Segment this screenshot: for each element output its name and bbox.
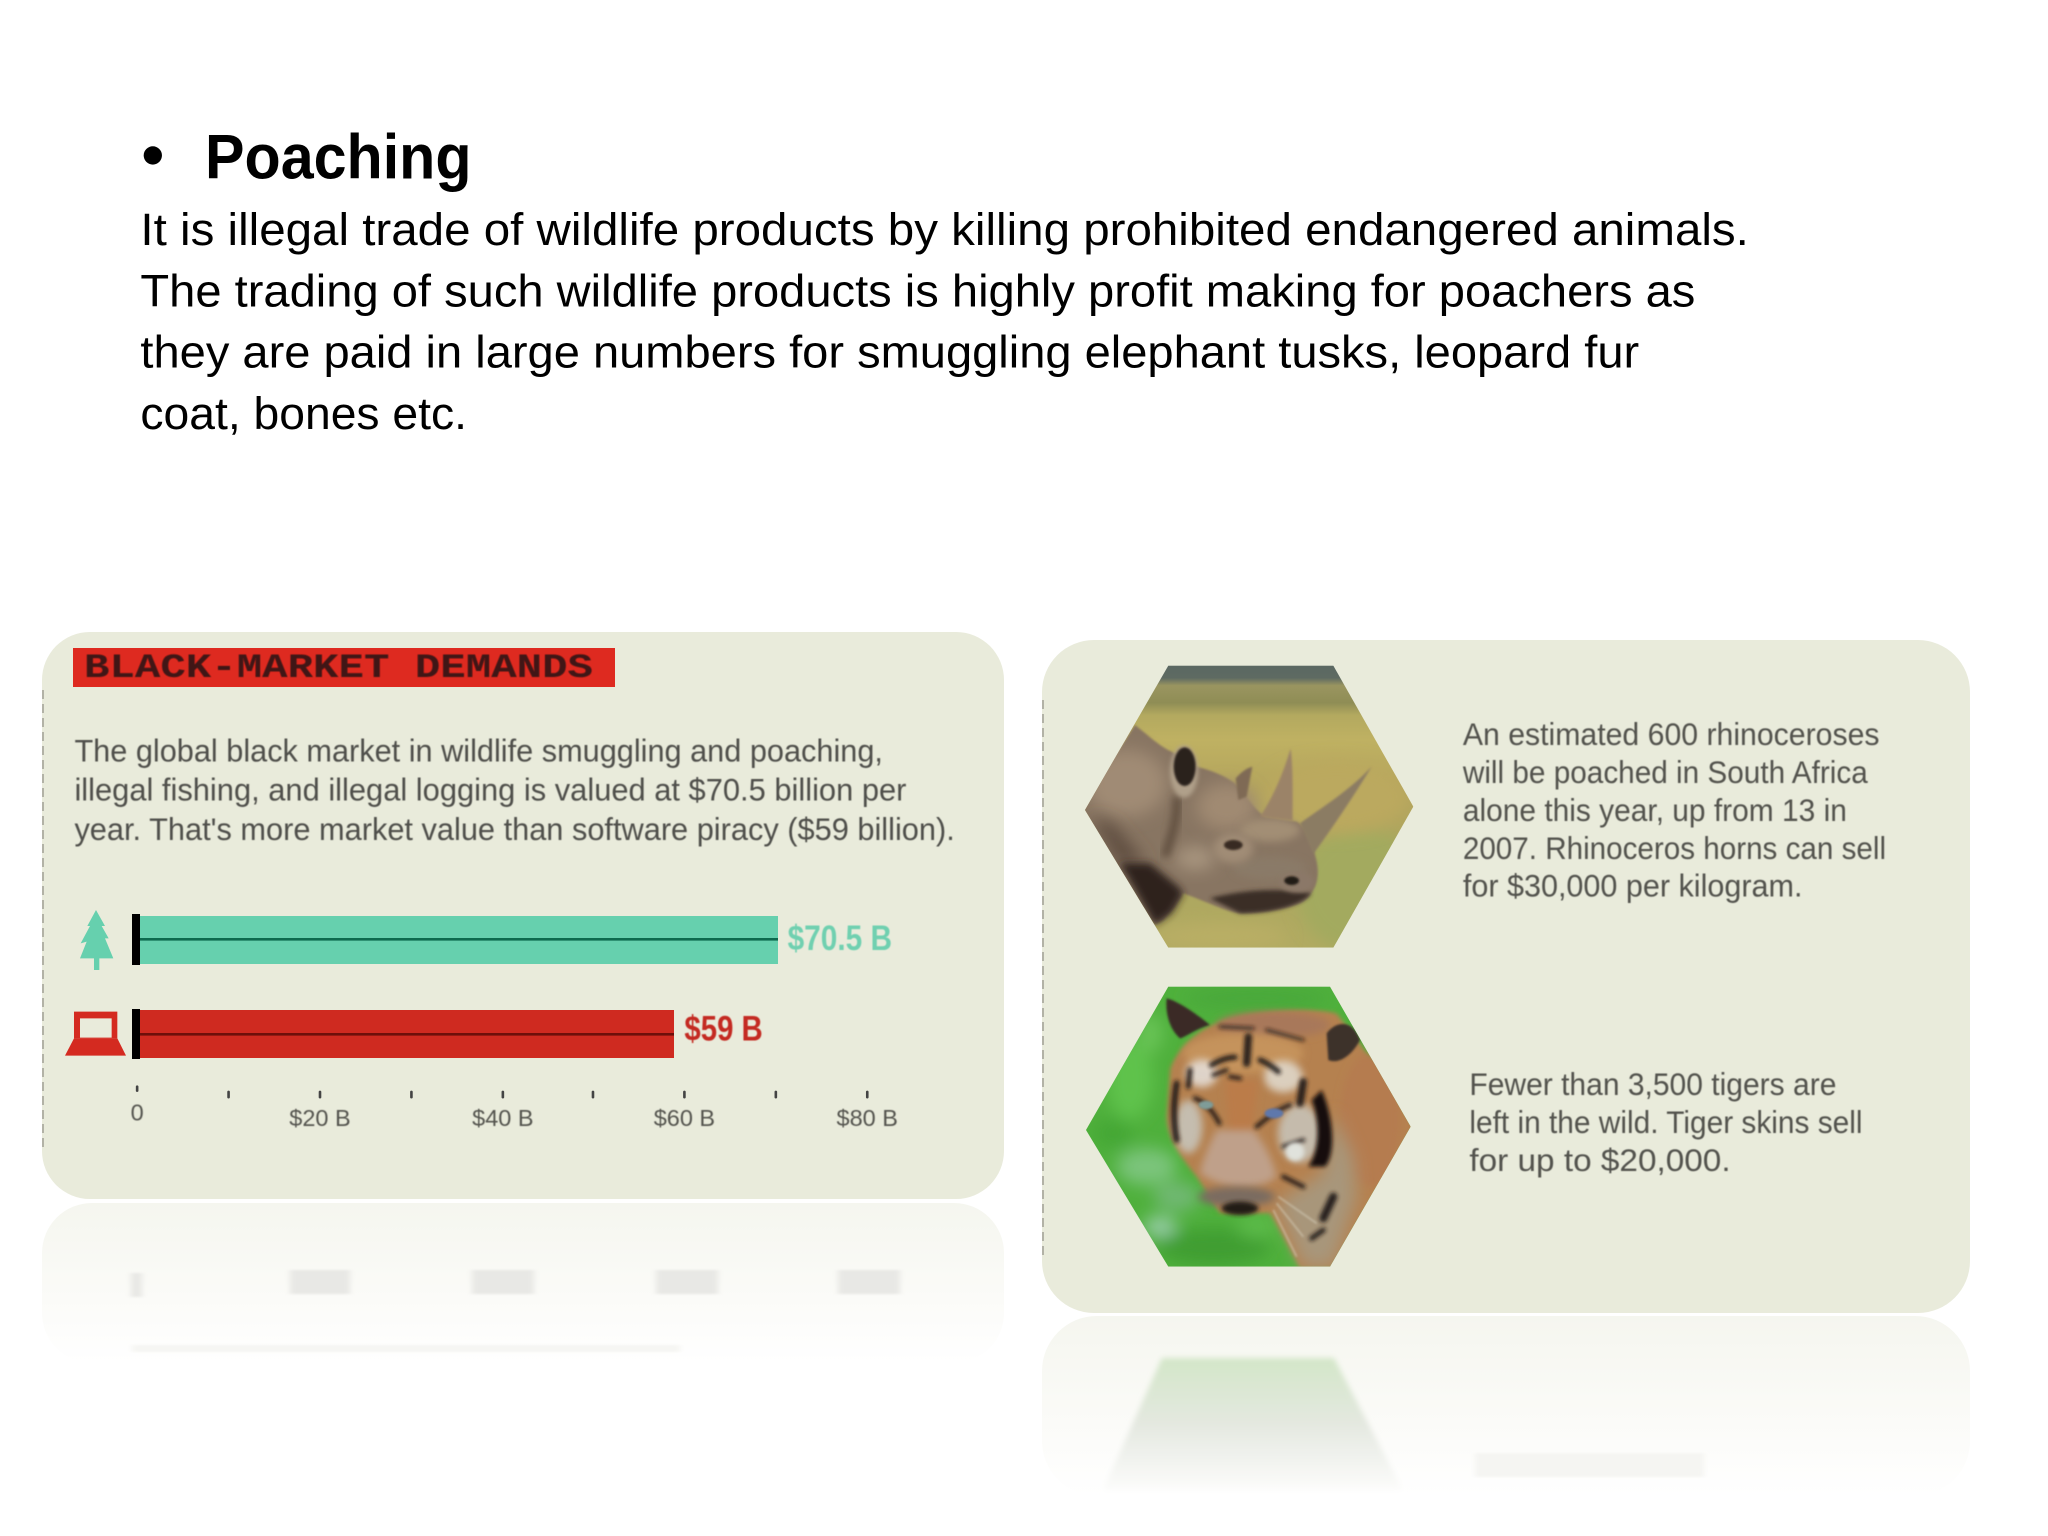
dark flank and neck xyxy=(1090,817,1147,867)
photo: rhinoceros hexagon xyxy=(1085,666,1414,948)
photo: tiger hexagon xyxy=(1086,986,1411,1267)
horns xyxy=(1236,767,1252,800)
tiger caption text: Fewer than 3,500 tigers are xyxy=(1469,1067,1836,1102)
rhino caption text: for $30,000 per kilogram. xyxy=(1463,869,1802,904)
black ruff stripe xyxy=(1308,1090,1332,1167)
rhino caption text: alone this year, up from 13 in xyxy=(1463,793,1847,828)
muzzle xyxy=(1200,1130,1277,1187)
label: $59 B: $59 B xyxy=(684,1009,763,1048)
title: Poaching: Poaching xyxy=(205,122,472,192)
label: $70.5 B: $70.5 B xyxy=(788,919,892,958)
intro text block: coat, bones etc. xyxy=(140,388,467,439)
rhino caption text: An estimated 600 rhinoceroses xyxy=(1463,717,1880,752)
intro text block: they are paid in large numbers for smuggling elephant tusks, leopard fur xyxy=(140,327,1639,378)
intro text block: The trading of such wildlife products is highly profit making for poachers as xyxy=(140,266,1695,317)
white face patches xyxy=(1174,1059,1322,1163)
reflection of left panel xyxy=(42,1203,1004,1363)
intro text block xyxy=(140,204,1749,439)
nostril xyxy=(1283,886,1307,895)
rhino caption text: 2007. Rhinoceros horns can sell xyxy=(1463,831,1886,866)
icon: laptop xyxy=(65,1012,126,1056)
tiger caption text: left in the wild. Tiger skins sell xyxy=(1469,1105,1863,1140)
reflected axis labels xyxy=(131,1270,900,1352)
face xyxy=(1183,1033,1303,1073)
dashed left edge xyxy=(1042,700,1044,1260)
reflected tiger hexagon xyxy=(1103,1358,1403,1490)
x axis xyxy=(131,1087,898,1131)
axis labels: $60 B xyxy=(654,1105,715,1131)
body tones xyxy=(1217,1012,1330,1038)
grass tones xyxy=(1093,988,1330,1265)
body shading xyxy=(1087,750,1167,817)
axis labels xyxy=(131,1100,898,1131)
dark jaw xyxy=(1210,890,1312,913)
ear xyxy=(1170,746,1198,798)
description text: The global black market in wildlife smuggling and poaching, xyxy=(74,733,883,768)
ears xyxy=(1166,998,1210,1038)
rhino body and head xyxy=(1080,725,1318,925)
tiger body xyxy=(1167,1010,1417,1268)
panel: rhino and tiger facts xyxy=(1042,640,1970,1313)
axis labels: $40 B xyxy=(472,1105,534,1131)
heading bar: BLACK-MARKET DEMANDS xyxy=(84,650,593,688)
description text: year. That's more market value than software piracy ($59 billion). xyxy=(74,812,955,847)
reflected caption text xyxy=(1475,1453,1704,1477)
whiskers xyxy=(1273,1197,1317,1257)
nose bridge xyxy=(1225,1080,1258,1137)
panel background xyxy=(42,632,1004,1199)
tiger caption text: for up to $20,000. xyxy=(1469,1143,1731,1178)
axis labels: 0 xyxy=(131,1100,144,1126)
axis labels: $80 B xyxy=(837,1105,898,1131)
reflection of right panel xyxy=(1042,1316,1970,1496)
neck fold xyxy=(1165,797,1177,857)
rhino caption text: will be poached in South Africa xyxy=(1462,755,1868,790)
dashed left edge xyxy=(42,690,44,1150)
tiger caption text xyxy=(1469,1067,1863,1178)
description text: illegal fishing, and illegal logging is valued at $70.5 billion per xyxy=(74,773,906,808)
description text xyxy=(74,733,955,847)
icon: tree xyxy=(80,910,113,970)
stripes xyxy=(1174,1027,1333,1238)
cheek patch xyxy=(1286,1142,1304,1161)
axis labels: $20 B xyxy=(289,1105,351,1131)
axis ticks xyxy=(137,1087,867,1097)
bar: software piracy xyxy=(132,1009,674,1059)
eye xyxy=(1213,833,1253,863)
rhino caption text xyxy=(1462,717,1886,904)
panel: black-market demands xyxy=(42,632,1004,1199)
bullet xyxy=(144,146,162,165)
eyes xyxy=(1199,1101,1213,1109)
panel background xyxy=(1042,640,1970,1313)
intro text block: It is illegal trade of wildlife products by killing prohibited endangered animals. xyxy=(140,204,1749,255)
bar: wildlife trade xyxy=(132,914,778,965)
